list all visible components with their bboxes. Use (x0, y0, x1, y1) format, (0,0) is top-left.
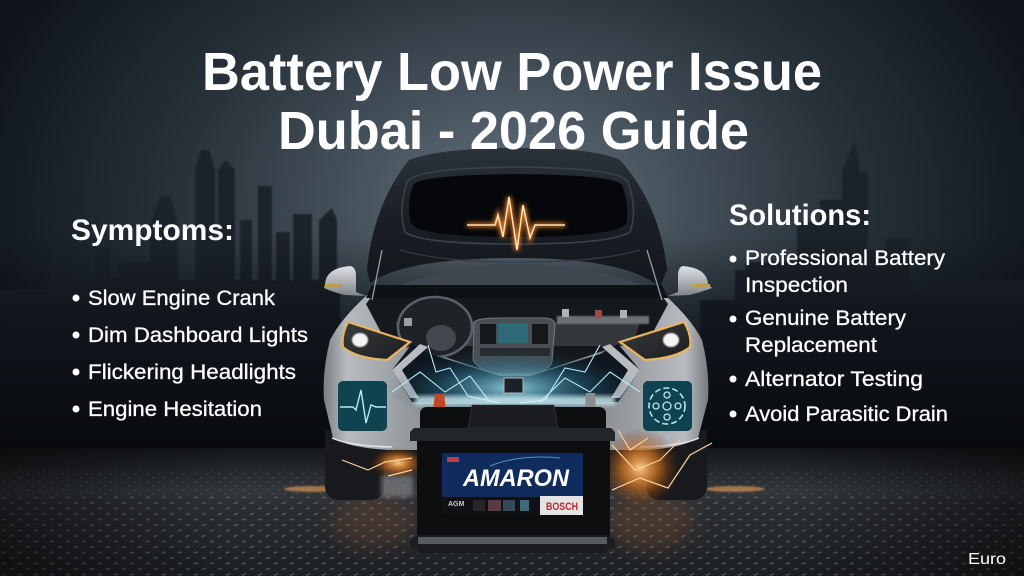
watermark: Euro: Euro (968, 551, 1006, 568)
list: solutions: Alternator Testing (745, 367, 923, 391)
battery (410, 393, 615, 553)
battery top cover (420, 407, 606, 428)
right mirror (668, 266, 712, 296)
car: front view with open hood (324, 148, 712, 500)
battery case (417, 441, 610, 537)
left lower bumper lip (332, 438, 392, 447)
left headlight (343, 322, 410, 360)
left skyline towers (0, 150, 340, 450)
bright electric band (415, 396, 615, 405)
grille area (392, 344, 640, 402)
list: solutions: Genuine Battery (745, 306, 906, 330)
heading: symptoms: Symptoms: (71, 214, 234, 247)
skyline silhouette (0, 140, 1024, 450)
blue electric glow (387, 350, 637, 426)
BOSCH label: BOSCH (546, 501, 578, 513)
battery terminals (433, 394, 446, 410)
orange sparks around battery (342, 428, 712, 508)
glowing orange pulse line (467, 197, 565, 250)
steering hub (426, 325, 456, 351)
left teal pulse icon (338, 381, 387, 431)
BOSCH label (540, 496, 583, 515)
list: symptoms: Dim Dashboard Lights (88, 323, 308, 347)
grille silver V left (392, 344, 428, 398)
car body (324, 295, 708, 450)
console buttons (480, 348, 550, 356)
right headlight (620, 322, 690, 360)
left mirror (324, 266, 366, 296)
battery blue label: AMARON (462, 465, 570, 492)
small chip icon (504, 378, 523, 393)
battery blue label (442, 453, 583, 497)
list: symptoms: Slow Engine Crank (88, 286, 275, 310)
title (202, 42, 822, 161)
list: solutions: Avoid Parasitic Drain (745, 402, 948, 426)
list: symptoms: Flickering Headlights (88, 360, 296, 384)
panel: symptoms (71, 214, 308, 421)
wiper and cowl (366, 285, 668, 298)
center console (473, 318, 555, 374)
battery info strip (442, 497, 540, 515)
light patch beside left tyre (381, 475, 413, 497)
right teal network icon (643, 381, 692, 431)
hood frame line (402, 167, 634, 244)
vents (480, 324, 548, 344)
dashboard steering wheel (398, 297, 472, 357)
title: Battery Low Power Issue (202, 42, 822, 102)
engine bay (366, 296, 668, 372)
left tyre (325, 430, 384, 500)
right skyline towers (700, 140, 1024, 450)
battery info strip: AGM (448, 501, 464, 508)
right tyre (647, 430, 707, 500)
hood struts (372, 250, 662, 300)
list: symptoms: Engine Hesitation (88, 397, 262, 421)
teal display (498, 323, 528, 343)
title: Dubai - 2026 Guide (278, 101, 749, 161)
dashboard panel (395, 322, 640, 346)
hood underside (367, 148, 667, 287)
skyline fade into darkness (0, 235, 1024, 455)
list: symptoms (72, 286, 308, 421)
battery lid rim (410, 428, 615, 441)
engine parts (404, 309, 649, 326)
list: solutions (730, 246, 948, 426)
hood rib line (400, 250, 640, 262)
panel: solutions (729, 199, 948, 426)
list: solutions: Inspection (745, 273, 848, 297)
list: solutions: Replacement (745, 333, 877, 357)
hood dark inner panel (409, 174, 627, 237)
floor: diamond tread plate (0, 448, 1024, 576)
heading: solutions: Solutions: (729, 199, 871, 232)
windshield (400, 264, 642, 285)
grille silver V right (602, 344, 640, 398)
list: solutions: Professional Battery (745, 246, 945, 270)
battery base (410, 535, 615, 553)
right lower bumper lip (640, 438, 699, 447)
blue lightning arcs (392, 345, 640, 403)
